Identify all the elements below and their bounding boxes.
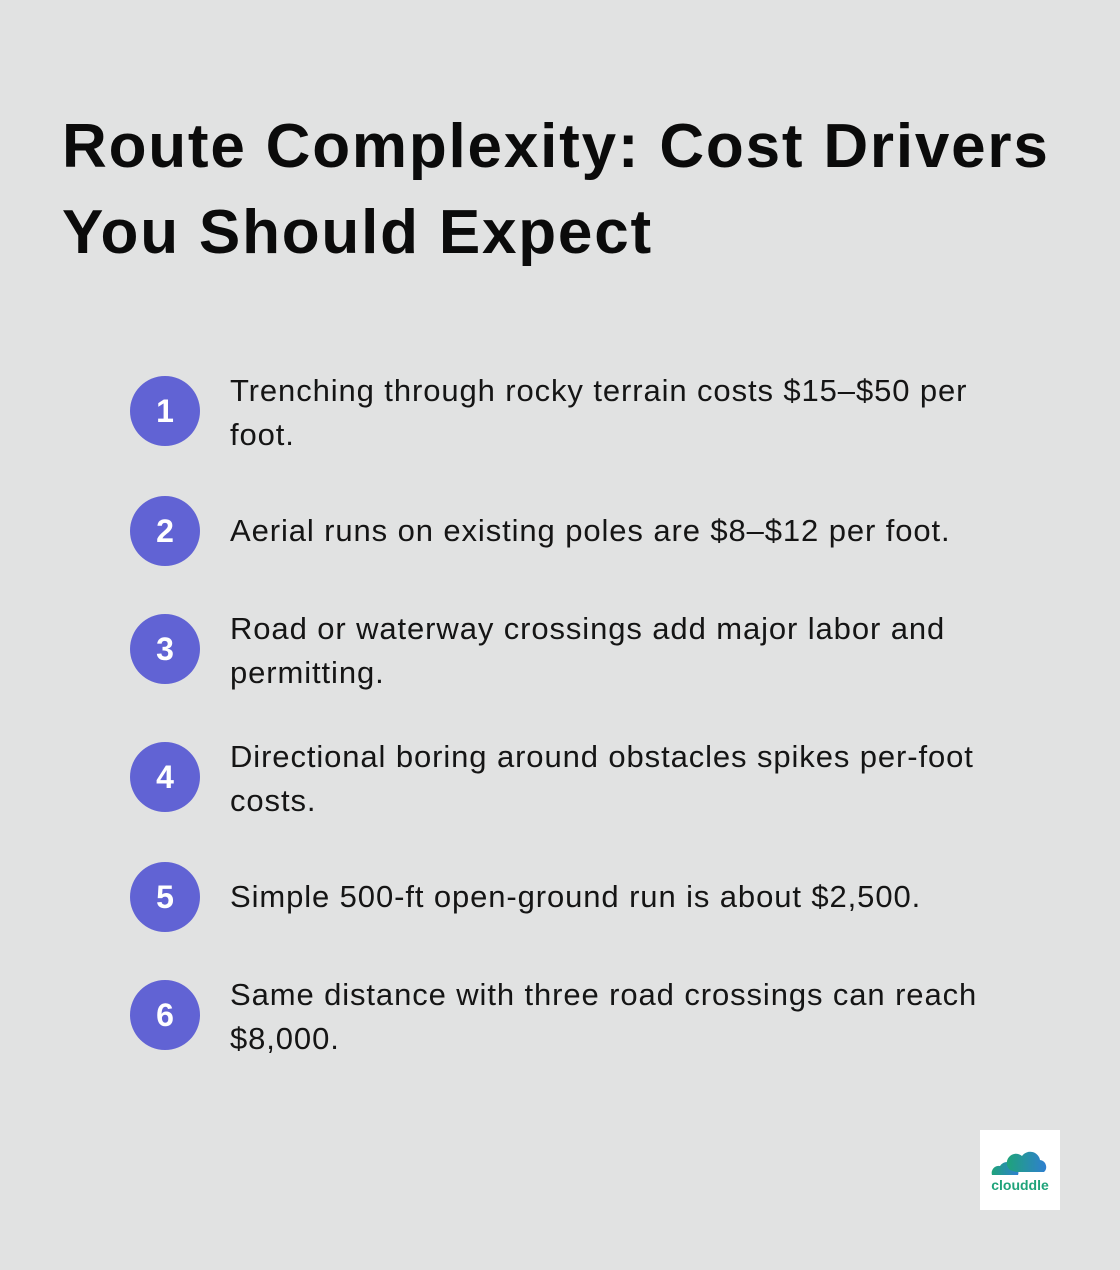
item 2: 2 — [156, 513, 174, 549]
item 5 — [130, 862, 921, 932]
item 6: Same distance with three road crossings can reach $8,000. — [230, 977, 977, 1056]
item 4: Directional boring around obstacles spikes per-foot costs. — [230, 739, 974, 818]
item 6: 6 — [156, 997, 174, 1033]
title: You Should Expect — [62, 198, 653, 267]
item 2: Aerial runs on existing poles are $8–$12 per foot. — [230, 513, 951, 548]
logo: clouddle — [991, 1177, 1049, 1193]
item 3: Road or waterway crossings add major labor and permitting. — [230, 611, 945, 690]
title: Route Complexity: Cost Drivers — [62, 112, 1050, 181]
item 4: 4 — [156, 759, 174, 795]
title — [62, 112, 1050, 267]
logo — [980, 1130, 1060, 1210]
item 2 — [130, 496, 951, 566]
item 5: 5 — [156, 879, 174, 915]
item 3: 3 — [156, 631, 174, 667]
item 1: Trenching through rocky terrain costs $15–$50 per foot. — [230, 373, 967, 452]
item 1: 1 — [156, 393, 174, 429]
item 5: Simple 500-ft open-ground run is about $2,500. — [230, 879, 921, 914]
